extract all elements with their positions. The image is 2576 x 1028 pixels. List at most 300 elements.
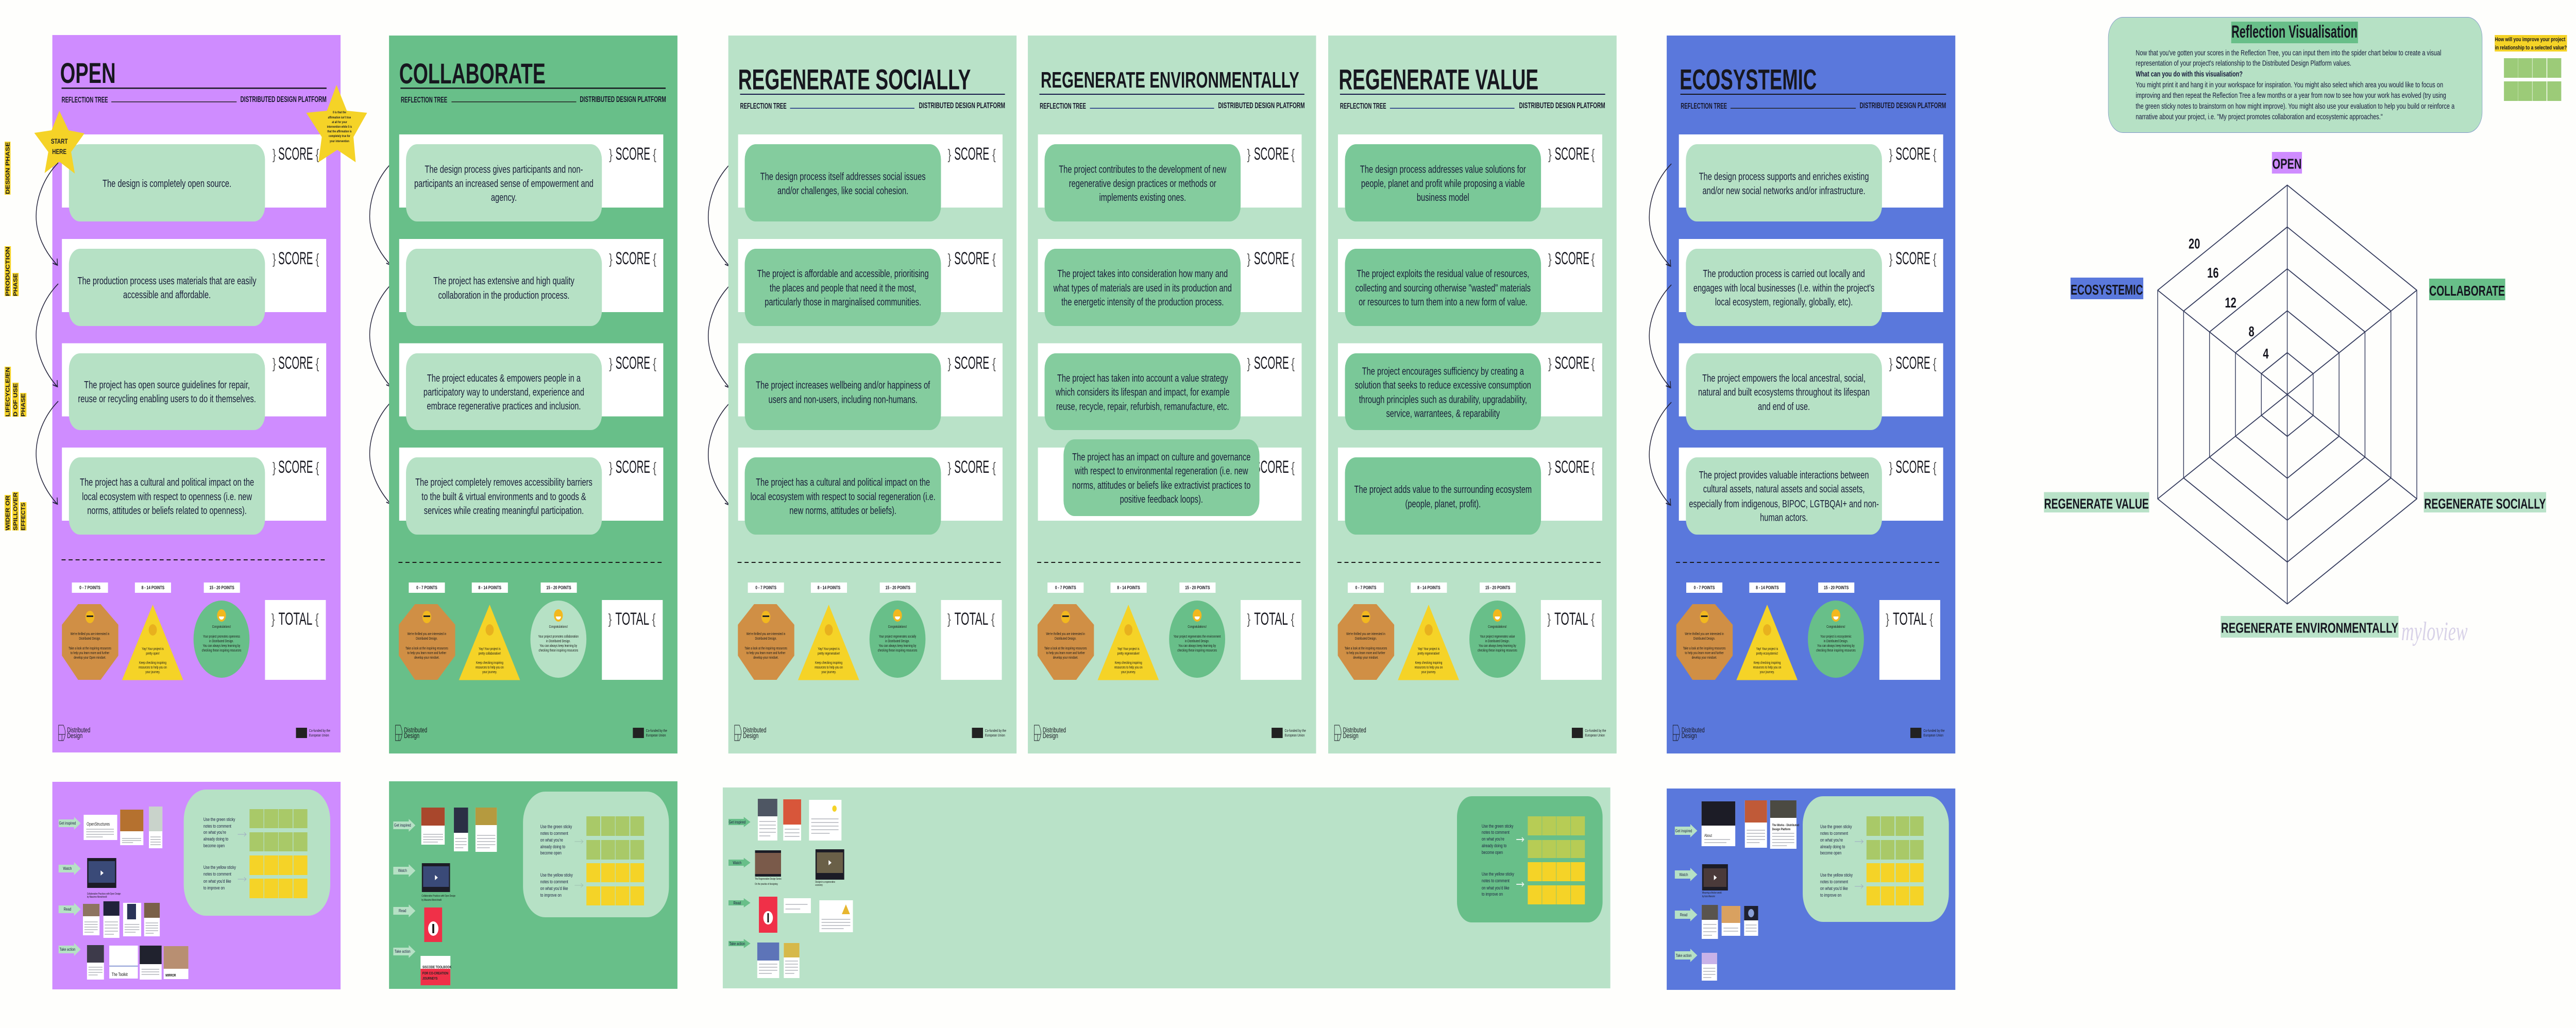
rows and scores: reuse, recycle, repair, refurbish, remanufacture, etc. <box>1056 401 1229 413</box>
panel: collaborate resources: Take action <box>395 949 411 954</box>
resource cards <box>420 808 497 985</box>
rows and scores: } <box>1548 251 1552 267</box>
logo: Co-funded by the European Union <box>633 728 667 738</box>
scoring legend: Keep checking inspiring <box>1754 661 1781 665</box>
subheading: REFLECTION TREE <box>740 101 787 110</box>
sticky note box: become open <box>1482 850 1503 855</box>
resource cards: On the practice of designing <box>755 882 778 885</box>
scoring legend: your journey. <box>821 670 836 674</box>
heading: REGENERATE SOCIALLY: REGENERATE SOCIALLY <box>738 64 971 96</box>
rows and scores: local ecosystem, regionally, globally, etc). <box>1715 296 1853 308</box>
rows and scores: The project exploits the residual value of resources, <box>1357 268 1529 280</box>
scoring legend <box>1337 562 1603 680</box>
rows and scores: } <box>1889 147 1892 163</box>
scoring legend: your journey. <box>482 670 497 674</box>
rows and scores: } <box>1247 356 1250 372</box>
explanation text: You might print it and hang it in your workspace for inspiration. You might also select which area you would like to focus on <box>2136 81 2443 89</box>
scoring legend: in Distributed Design. <box>1824 639 1848 643</box>
rows and scores: what types of materials are used in its production and <box>1053 282 1232 294</box>
arrows: collaborate flow <box>370 163 392 504</box>
arrows: regenerate socially flow <box>708 164 731 505</box>
rows and scores: SCORE <box>616 144 650 164</box>
scoring legend: 0 - 7 POINTS <box>1694 585 1715 590</box>
star: scoring explanation <box>307 85 367 162</box>
sticky note box: notes to comment <box>204 871 231 877</box>
axis label: collaborate: COLLABORATE <box>2429 283 2505 299</box>
subheading <box>61 94 327 104</box>
axis label: regenerate value: REGENERATE VALUE <box>2044 496 2149 512</box>
logo: Distributed Design: Design <box>743 732 758 740</box>
rows and scores: { <box>316 460 319 476</box>
resource cards: Design in a regenerative <box>815 880 836 883</box>
star: scoring explanation: at all for your <box>332 121 347 124</box>
panel: collaborate resources: Get inspired <box>394 823 411 828</box>
rows and scores: } <box>1247 460 1250 476</box>
scoring legend: Keep checking inspiring <box>139 661 166 665</box>
panel: ECOSYSTEMIC <box>1667 36 1955 753</box>
scoring legend: Your project is ecosystemic <box>1820 635 1852 639</box>
rows and scores: collaboration in the production process. <box>438 289 569 301</box>
rows and scores: { <box>1591 460 1595 476</box>
rows and scores: norms, attitudes or beliefs like extractivist practices to <box>1072 479 1250 491</box>
scoring legend: Yay! Your project is <box>818 647 840 651</box>
rows and scores: The design process gives participants and non- <box>425 163 583 175</box>
logo: Co-funded by the European Union: European Union <box>985 733 1005 738</box>
scoring legend: 15 - 20 POINTS <box>1824 585 1849 590</box>
rows and scores: participants an increased sense of empowerment and <box>414 178 594 190</box>
side labels: lifecycle phases: WIDER OR <box>5 495 11 530</box>
rows and scores: service, warrantees, & reparability <box>1386 407 1500 419</box>
rows and scores: { <box>653 251 656 267</box>
rows and scores: } <box>1548 460 1552 476</box>
rows and scores: } <box>948 251 951 267</box>
scoring legend: pretty collaborative! <box>479 652 501 656</box>
scoring legend: 0 - 7 POINTS <box>1355 585 1377 590</box>
star: scoring explanation: affirmation isn't true <box>328 116 351 119</box>
rows and scores: SCORE <box>1254 249 1289 268</box>
scoring legend <box>738 562 1003 680</box>
scoring legend: Keep checking inspiring <box>476 661 503 665</box>
rows and scores: The project educates & empowers people in a <box>427 372 581 384</box>
rows and scores: { <box>1933 147 1937 163</box>
scoring legend: } <box>1886 611 1889 627</box>
scoring legend: 15 - 20 POINTS <box>1185 585 1210 590</box>
rows and scores: The project has open source guidelines for repair, <box>84 379 250 391</box>
panel: open resources: Read <box>64 906 71 912</box>
tags <box>59 817 81 956</box>
resource cards: JOURNEYS <box>422 976 438 981</box>
sticky note box <box>1803 796 1949 922</box>
scoring legend: { <box>1591 611 1595 627</box>
rows and scores: (people, planet, profit). <box>1405 498 1481 510</box>
rows and scores: } <box>1548 147 1552 163</box>
radar chart: 16 <box>2207 265 2218 281</box>
rows and scores: the places and people that need it the most, <box>770 282 916 294</box>
panel: REGENERATE ENVIRONMENTALLY <box>1028 36 1316 753</box>
scoring legend: resources to help you on <box>1114 665 1143 670</box>
sticky note box: Use the yellow sticky <box>204 865 236 870</box>
sticky note box: Use the green sticky <box>1820 824 1852 829</box>
rows and scores: } <box>273 460 276 476</box>
axis label: regenerate environmentally: REGENERATE ENVIRONMENTALLY <box>2221 620 2398 636</box>
rows and scores: SCORE <box>616 353 650 373</box>
rows and scores: implements existing ones. <box>1099 192 1186 203</box>
heading: COLLABORATE: COLLABORATE <box>399 58 546 90</box>
scoring legend: Keep checking inspiring <box>1115 661 1142 665</box>
scoring legend <box>1037 562 1303 680</box>
explanation text: the green sticky notes to brainstorm on how might improve). You might also use your evaluation to help you build or reinforce a <box>2136 102 2454 110</box>
scoring legend: Your project promotes openness <box>203 635 240 639</box>
scoring legend: Take a look at the inspiring resources <box>1044 646 1087 650</box>
logo: Co-funded by the European Union <box>296 728 330 738</box>
scoring legend: 8 - 14 POINTS <box>818 585 841 590</box>
resource cards: economy <box>815 883 823 886</box>
rows and scores: SCORE <box>278 144 313 164</box>
scoring legend: checking these inspiring resources <box>1177 648 1217 653</box>
panel: ecosystemic resources: Take action <box>1676 953 1691 958</box>
rows and scores: } <box>609 147 613 163</box>
sticky note box: become open <box>540 850 562 855</box>
scoring legend: Distributed Design. <box>1693 637 1715 641</box>
side labels: lifecycle phases: LIFECYCLE/EN <box>5 367 11 417</box>
scoring legend: Distributed Design. <box>755 637 777 641</box>
logo: Distributed Design <box>1034 725 1066 741</box>
scoring legend: to help you learn more and further <box>747 651 785 655</box>
logo: Distributed Design: Distributed <box>1682 726 1705 734</box>
logo: Co-funded by the European Union: European Union <box>646 733 666 738</box>
scoring legend: resources to help you on <box>1415 665 1443 670</box>
panel: open resources: Get inspired <box>59 820 76 826</box>
star: scoring explanation: that the affirmation is <box>327 130 351 133</box>
scoring legend: develop your mindset. <box>1692 656 1717 660</box>
scoring legend: 8 - 14 POINTS <box>479 585 501 590</box>
rows and scores <box>399 134 663 535</box>
rows and scores: { <box>1291 460 1295 476</box>
rows and scores: with respect to environmental regeneration (i.e. new <box>1074 465 1248 477</box>
subheading: DISTRIBUTED DESIGN PLATFORM <box>1519 100 1605 110</box>
panel: open resources <box>53 782 341 989</box>
sticky note box: on what you're <box>1482 836 1504 842</box>
sticky note box: on what you'd like <box>1820 886 1848 891</box>
rows and scores: engages with local businesses (I.e. within the project's <box>1693 282 1874 294</box>
scoring legend: Keep checking inspiring <box>1415 661 1442 665</box>
scoring legend: We're thrilled you are interested in <box>408 632 446 636</box>
sticky note box: on what you're <box>204 830 226 835</box>
axis label: regenerate socially: REGENERATE SOCIALLY <box>2424 496 2546 512</box>
logo: Co-funded by the European Union: Co-funded by the <box>309 729 330 733</box>
rows and scores: business model <box>1417 192 1469 203</box>
rows and scores: cultural assets, natural assets and social assets, <box>1703 483 1865 495</box>
logo: Co-funded by the European Union: European Union <box>1285 733 1305 738</box>
sticky note box: notes to comment <box>540 831 568 836</box>
scoring legend <box>1676 562 1942 680</box>
explanation text: narrative about your project, i.e. "My project promotes collaboration and ecosystemic approaches." <box>2136 113 2383 121</box>
rows and scores: SCORE <box>278 353 313 373</box>
sticky note box: already doing to <box>540 844 565 849</box>
rows and scores: SCORE <box>616 249 650 268</box>
rows and scores: The design process itself addresses social issues <box>760 170 926 182</box>
star: scoring explanation: intervention while 5 is <box>327 125 352 129</box>
logo: Distributed Design <box>396 725 427 741</box>
explanation text: Now that you've gotten your scores in the Reflection Tree, you can input them into the spider chart below to create a visual <box>2136 49 2442 57</box>
rows and scores: through principles such as durability, upgradability, <box>1359 393 1527 405</box>
resource cards: by Massimo Menichinelli <box>87 895 107 898</box>
heading: REGENERATE ENVIRONMENTALLY: REGENERATE ENVIRONMENTALLY <box>1041 67 1299 93</box>
scoring legend: checking these inspiring resources <box>1478 648 1517 653</box>
side labels: lifecycle phases <box>5 142 26 530</box>
scoring legend: your journey. <box>1421 670 1436 674</box>
rows and scores: people, planet and profit while proposing a viable <box>1361 178 1525 190</box>
scoring legend: Congratulations! <box>888 625 907 629</box>
scoring legend: TOTAL <box>1893 609 1927 629</box>
scoring legend: to help you learn more and further <box>408 651 446 655</box>
scoring legend: } <box>272 611 275 627</box>
resource cards: SISCODE TOOLBOOK <box>422 965 452 969</box>
rows and scores: SCORE <box>1895 457 1930 477</box>
scoring legend: 15 - 20 POINTS <box>886 585 910 590</box>
scoring legend: } <box>947 611 951 627</box>
callout: improve your project: How will you improve your project <box>2495 37 2566 43</box>
side labels: lifecycle phases: DESIGN PHASE <box>5 142 11 194</box>
radar chart: 4 <box>2263 346 2269 362</box>
logo: Co-funded by the European Union: Co-funded by the <box>646 729 667 733</box>
scoring legend: Congratulations! <box>1826 625 1845 629</box>
subheading: REFLECTION TREE <box>1040 101 1086 110</box>
arrows: ecosystemic flow <box>1649 164 1671 505</box>
scoring legend: { <box>1929 611 1933 627</box>
subheading: DISTRIBUTED DESIGN PLATFORM <box>580 94 666 104</box>
sticky note box: on what you'd like <box>1482 885 1510 890</box>
sticky note box: notes to comment <box>1820 879 1849 884</box>
scoring legend: } <box>1547 611 1551 627</box>
sticky note box: on what you're <box>1820 837 1843 843</box>
sticky note box: to improve on <box>1820 893 1842 898</box>
scoring legend: Take a look at the inspiring resources <box>1683 646 1725 650</box>
rows and scores: } <box>609 356 613 372</box>
scoring legend: Distributed Design. <box>1355 637 1377 641</box>
panel: regenerate resources: Take action <box>729 941 745 946</box>
rows and scores: { <box>1933 251 1937 267</box>
radar chart <box>2044 152 2546 638</box>
scoring legend: { <box>652 611 655 627</box>
radar chart: 8 <box>2249 324 2255 340</box>
scoring legend: 0 - 7 POINTS <box>1055 585 1076 590</box>
scoring legend: 0 - 7 POINTS <box>755 585 776 590</box>
sticky note box: Use the green sticky <box>540 824 572 829</box>
rows and scores: to the built & virtual environments and to goods & <box>421 491 586 503</box>
resource cards <box>1702 800 1799 981</box>
scoring legend: We're thrilled you are interested in <box>1046 632 1085 636</box>
logo: Distributed Design: Distributed <box>67 726 90 734</box>
rows and scores: natural and built ecosystems throughout its lifespan <box>1698 386 1870 398</box>
rows and scores: The design process supports and enriches existing <box>1699 170 1869 182</box>
arrows: open flow <box>36 163 58 504</box>
rows and scores: The project has an impact on culture and governance <box>1072 451 1250 463</box>
scoring legend: your journey. <box>145 670 160 674</box>
callout: improve your project <box>2495 35 2567 101</box>
rows and scores: solution that seeks to reduce excessive consumption <box>1355 379 1531 391</box>
rows and scores: The project increases wellbeing and/or happiness of <box>756 379 930 391</box>
panel: REGENERATE SOCIALLY <box>728 36 1016 753</box>
radar chart: 20 <box>2189 236 2200 252</box>
rows and scores: SCORE <box>1895 144 1930 164</box>
resource cards: The Toolkit <box>112 972 128 977</box>
resource cards: by Ezio Manzini <box>1702 895 1715 898</box>
sticky note box: Use the yellow sticky <box>540 872 573 878</box>
rows and scores: norms, attitudes or beliefs related to openness). <box>87 505 247 517</box>
rows and scores: The project encourages sufficiency by creating a <box>1362 365 1524 377</box>
panel: reflection visualisation intro <box>2108 18 2482 133</box>
rows and scores: } <box>1889 251 1892 267</box>
logo: Co-funded by the European Union: European Union <box>309 733 329 738</box>
scoring legend: Congratulations! <box>549 625 568 629</box>
scoring legend: Keep checking inspiring <box>815 661 842 665</box>
rows and scores: SCORE <box>1555 249 1589 268</box>
radar chart: 12 <box>2225 295 2236 311</box>
rows and scores: agency. <box>491 192 517 203</box>
rows and scores: The project has a cultural and political impact on the <box>756 476 930 488</box>
tags <box>728 817 751 948</box>
sticky note box: already doing to <box>1482 843 1507 848</box>
panel: collaborate resources <box>389 781 677 989</box>
rows and scores: or resources to turn them into a new form of value. <box>1359 296 1528 308</box>
scoring legend: { <box>1291 611 1294 627</box>
logo: Co-funded by the European Union: Co-funded by the <box>1585 729 1606 733</box>
rows and scores: } <box>273 147 276 163</box>
scoring legend: to help you learn more and further <box>1346 651 1385 655</box>
rows and scores <box>1679 134 1943 535</box>
subheading: DISTRIBUTED DESIGN PLATFORM <box>919 100 1005 110</box>
scoring legend: develop your mindset. <box>414 656 439 660</box>
logo: Distributed Design <box>735 725 766 741</box>
rows and scores: SCORE <box>1254 353 1289 373</box>
rows and scores: The design process addresses value solutions for <box>1360 163 1526 175</box>
panel: regenerate resources: Read <box>734 900 741 905</box>
rows and scores: embrace regenerative practices and inclusion. <box>427 400 581 412</box>
rows and scores: SCORE <box>954 144 989 164</box>
star: start here: START <box>51 137 68 145</box>
panel: open resources: Watch <box>63 866 72 871</box>
rows and scores: The project provides valuable interactions between <box>1699 469 1869 481</box>
sticky note box: notes to comment <box>1482 830 1510 835</box>
scoring legend: checking these inspiring resources <box>878 648 917 653</box>
subheading: REFLECTION TREE <box>1681 101 1727 110</box>
logo: Co-funded by the European Union: Co-funded by the <box>1923 729 1945 733</box>
rows and scores: } <box>1247 251 1250 267</box>
scoring legend: Your project promotes collaboration <box>538 635 579 639</box>
rows and scores: { <box>992 460 996 476</box>
subheading: REFLECTION TREE <box>401 95 447 104</box>
rows and scores: The project takes into consideration how many and <box>1057 268 1228 280</box>
rows and scores: The project is affordable and accessible, prioritising <box>757 268 929 280</box>
scoring legend: develop your mindset. <box>1053 656 1078 660</box>
rows and scores: } <box>948 356 951 372</box>
panel: regenerate resources: Watch <box>733 860 741 865</box>
rows and scores: SCORE <box>954 249 989 268</box>
side labels: lifecycle phases: PHASE <box>12 273 19 296</box>
logo: Distributed Design: Design <box>1043 732 1058 740</box>
scoring legend: Your project regenerates socially <box>879 635 917 639</box>
sticky note box: Use the green sticky <box>1482 824 1514 829</box>
rows and scores: The project empowers the local ancestral, social, <box>1702 372 1866 384</box>
side labels: lifecycle phases: PHASE <box>20 393 26 417</box>
rows and scores: } <box>1548 356 1552 372</box>
rows and scores: The production process is carried out locally and <box>1703 268 1865 280</box>
resource cards: Weaving a thicker world <box>1702 891 1722 894</box>
scoring legend: resources to help you on <box>815 665 843 670</box>
scoring legend: Your project regenerates the environment <box>1174 635 1221 639</box>
sticky note box: become open <box>1820 850 1842 855</box>
logo: Co-funded by the European Union <box>1910 728 1945 738</box>
side labels: lifecycle phases: SPILLOVER <box>12 492 19 530</box>
rows and scores <box>738 134 1003 535</box>
rows and scores: } <box>1889 460 1892 476</box>
explanation text: improving and then repeat the Reflection Tree a few months or a year from now to see how your work has evolved (try using <box>2136 91 2446 99</box>
scoring legend: 15 - 20 POINTS <box>1485 585 1511 590</box>
sticky note box <box>1457 796 1603 922</box>
scoring legend: 8 - 14 POINTS <box>1756 585 1779 590</box>
rows and scores: The project completely removes accessibility barriers <box>415 476 592 488</box>
rows and scores: } <box>273 251 276 267</box>
resource cards: OpenStructures <box>87 821 110 827</box>
rows and scores: The project contributes to the development of new <box>1059 163 1226 175</box>
rows and scores: { <box>653 460 656 476</box>
resource cards: Collaborative Practices with Open Design <box>87 892 121 895</box>
rows and scores: } <box>609 251 613 267</box>
rows and scores: SCORE <box>278 457 313 477</box>
scoring legend: in Distributed Design. <box>1185 639 1210 643</box>
resource cards: Collaborative Practices with Open Design <box>421 894 455 897</box>
sticky note box: to improve on <box>540 893 562 898</box>
rows and scores: particularly those in marginalised communities. <box>765 296 921 308</box>
rows and scores: { <box>1591 356 1595 372</box>
scoring legend: checking these inspiring resources <box>538 648 578 653</box>
rows and scores <box>1338 134 1602 535</box>
sticky note box: become open <box>204 843 225 848</box>
rows and scores: human actors. <box>1760 511 1808 523</box>
rows and scores: SCORE <box>1555 144 1589 164</box>
rows and scores: participatory way to understand, experience and <box>423 386 584 398</box>
heading: ECOSYSTEMIC: ECOSYSTEMIC <box>1680 64 1817 96</box>
side labels: lifecycle phases: D OF USE <box>12 383 19 417</box>
resource cards <box>83 807 189 980</box>
logo: Distributed Design <box>59 725 90 741</box>
rows and scores: { <box>1933 356 1937 372</box>
scoring legend: TOTAL <box>278 609 312 629</box>
scoring legend: pretty regenerative! <box>818 652 840 656</box>
scoring legend: pretty ecosystemic! <box>1756 652 1778 656</box>
heading: Reflection Visualisation <box>2231 22 2358 42</box>
heading: REGENERATE VALUE: REGENERATE VALUE <box>1338 64 1538 96</box>
scoring legend: Take a look at the inspiring resources <box>744 646 787 650</box>
rows and scores: positive feedback loops). <box>1120 493 1203 505</box>
scoring legend: TOTAL <box>1554 609 1588 629</box>
callout: improve your project: in relationship to a selected value? <box>2495 45 2567 51</box>
scoring legend: resources to help you on <box>139 665 167 670</box>
scoring legend: We're thrilled you are interested in <box>1346 632 1385 636</box>
panel: COLLABORATE <box>389 36 677 753</box>
subheading: REFLECTION TREE <box>1340 101 1386 110</box>
sticky note box: to improve on <box>1482 892 1503 897</box>
scoring legend: Distributed Design. <box>416 637 438 641</box>
rows and scores: { <box>316 147 319 163</box>
rows and scores: local ecosystem with respect to openness (i.e. new <box>82 491 252 503</box>
rows and scores: and end of use. <box>1758 401 1810 413</box>
rows and scores: } <box>609 460 613 476</box>
rows and scores: { <box>316 251 319 267</box>
rows and scores: { <box>992 251 996 267</box>
scoring legend: We're thrilled you are interested in <box>1685 632 1724 636</box>
